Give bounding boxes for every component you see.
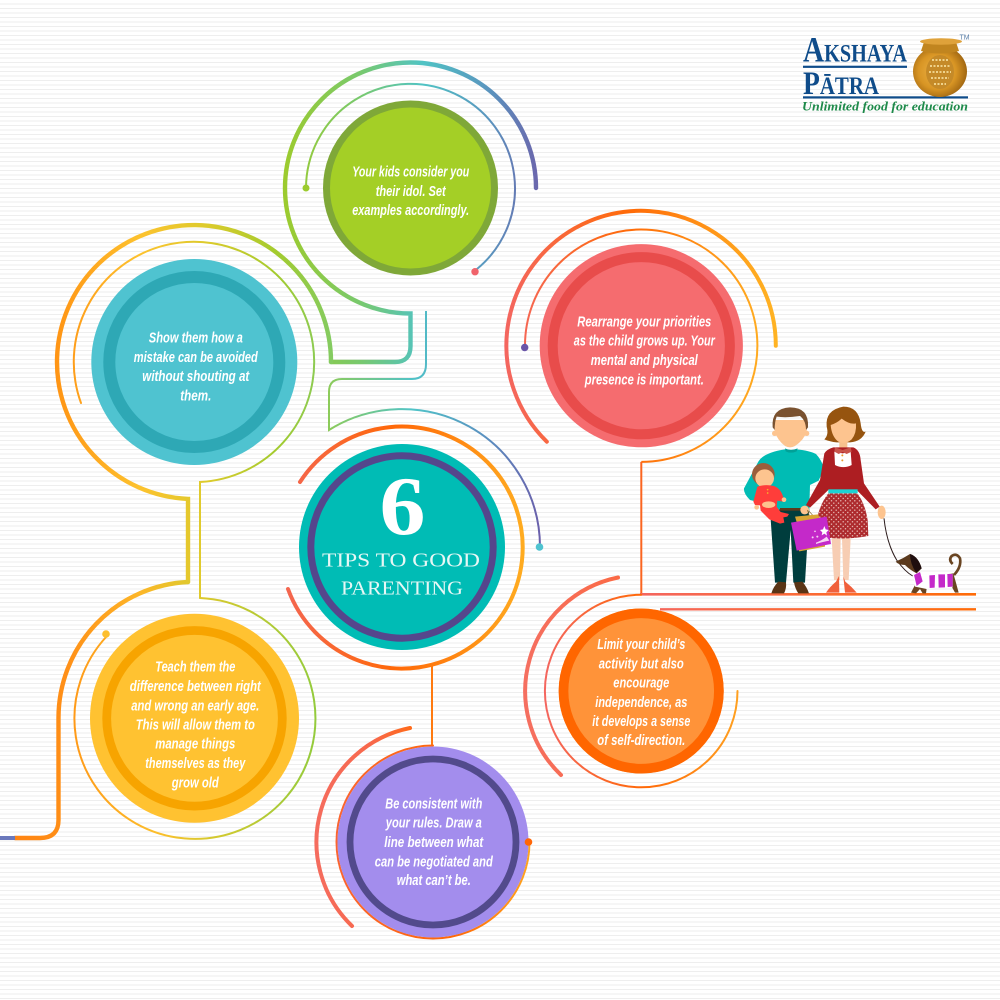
woman: [800, 407, 886, 593]
logo: Akshaya Patra: [802, 30, 970, 114]
panel: tip green: [302, 104, 494, 275]
title line two: PARENTING: [341, 577, 463, 599]
orange circle: [559, 608, 724, 774]
logo trademark: TM: [960, 34, 970, 42]
green tip text: their idol. Set: [376, 184, 447, 200]
green tip text: Your kids consider you: [352, 165, 469, 181]
yellow arc dot: [102, 630, 110, 638]
yellow tip text: Teach them the: [155, 660, 235, 676]
purple tip text: line between what: [384, 835, 484, 851]
panel: tip yellow: [90, 614, 299, 823]
logo rule two: [803, 96, 968, 98]
connector: orange thin arc: [545, 595, 738, 787]
red circle: [540, 244, 743, 447]
yellow tip text: grow old: [171, 775, 220, 791]
baby: [752, 463, 789, 524]
green tip text: examples accordingly.: [352, 203, 469, 219]
logo wordmark Patra: PĀTRA: [803, 66, 879, 102]
shopping bag: [791, 510, 831, 551]
red tip text: as the child grows up. Your: [574, 334, 716, 350]
red tip text: Rearrange your priorities: [577, 315, 711, 331]
connector: left edge blue stub: [0, 836, 15, 840]
connector: orange thick arc: [525, 578, 618, 775]
purple arc dot: [525, 838, 532, 846]
orange tip text: encourage: [613, 676, 669, 692]
teal tip text: them.: [180, 388, 211, 404]
teal tip text: without shouting at: [142, 369, 250, 385]
red tip text: mental and physical: [591, 353, 699, 369]
dog: [896, 554, 960, 593]
connector: purple thin arc: [336, 746, 530, 938]
connector: green outer arc and elbow: [285, 63, 536, 362]
teal tip text: [134, 331, 259, 404]
panel: tip purple: [338, 746, 532, 938]
logo wordmark Akshaya: AKSHAYA: [803, 30, 907, 70]
green circle: [326, 104, 494, 272]
purple tip text: can be negotiated and: [375, 854, 494, 870]
purple tip text: [375, 796, 494, 889]
connector: teal inner arc: [74, 242, 314, 598]
orange tip text: [592, 637, 690, 749]
connector: centre to purple line: [431, 666, 433, 746]
connector: teal outer arc into yellow outer arc: [57, 225, 331, 582]
title line one: TIPS TO GOOD: [322, 550, 480, 572]
yellow circle: [90, 614, 299, 823]
yellow tip text: manage things: [155, 737, 235, 753]
teal ring: [109, 277, 279, 447]
teal circle: [91, 259, 297, 465]
connector: centre orange arc: [288, 427, 523, 669]
ground line lower: [660, 608, 976, 610]
purple tip text: Be consistent with: [385, 796, 482, 812]
orange tip text: activity but also: [599, 656, 684, 672]
panel: tip orange: [559, 608, 724, 774]
panel: centre title: [299, 444, 543, 650]
yellow tip text: This will allow them to: [136, 717, 255, 733]
panel: tip red: [521, 244, 743, 447]
centre ring: [311, 456, 493, 638]
teal tip text: mistake can be avoided: [134, 350, 259, 366]
man: [744, 407, 824, 593]
panel: tip teal: [91, 259, 297, 465]
connector: thin line into centre arc: [329, 311, 540, 547]
yellow tip text: themselves as they: [145, 756, 246, 772]
green tip text: [352, 165, 469, 219]
green arc end dot: [471, 268, 479, 275]
connector: drop line to ground: [640, 462, 642, 595]
connector: green inner arc: [306, 84, 515, 269]
yellow tip text: and wrong an early age.: [131, 698, 259, 714]
logo tagline: Unlimited food for education: [802, 99, 968, 114]
green arc start dot: [302, 184, 310, 192]
connector: red outer arc: [506, 211, 776, 442]
illustration: family with dog: [744, 407, 960, 593]
ground line upper: [640, 593, 976, 596]
centre arc dot: [536, 543, 543, 551]
yellow ring: [107, 630, 282, 806]
red ring: [553, 257, 730, 434]
logo rule one: [803, 66, 907, 68]
connector: yellow outer arc to left edge: [15, 582, 188, 838]
icon: golden pot: [913, 38, 967, 97]
connector: yellow inner arc: [74, 598, 315, 839]
purple ring: [350, 759, 516, 925]
red arc dot: [521, 344, 528, 351]
yellow tip text: [130, 660, 262, 791]
orange tip text: independence, as: [595, 695, 687, 711]
leash: [884, 518, 913, 576]
yellow tip text: difference between right: [130, 679, 262, 695]
orange tip text: of self-direction.: [597, 733, 685, 749]
numeral six: 6: [380, 460, 426, 553]
centre circle: [299, 444, 505, 650]
orange tip text: Limit your child’s: [597, 637, 685, 653]
red tip text: presence is important.: [584, 372, 704, 388]
connector: red inner arc and drop line: [525, 230, 757, 462]
connector: purple thick arc: [316, 728, 410, 926]
purple tip text: your rules. Draw a: [385, 816, 482, 832]
orange tip text: it develops a sense: [592, 714, 690, 730]
red tip text: [574, 315, 716, 388]
teal tip text: Show them how a: [149, 331, 243, 347]
orange ring: [564, 613, 719, 769]
purple circle: [338, 746, 528, 938]
purple tip text: what can’t be.: [397, 873, 471, 889]
